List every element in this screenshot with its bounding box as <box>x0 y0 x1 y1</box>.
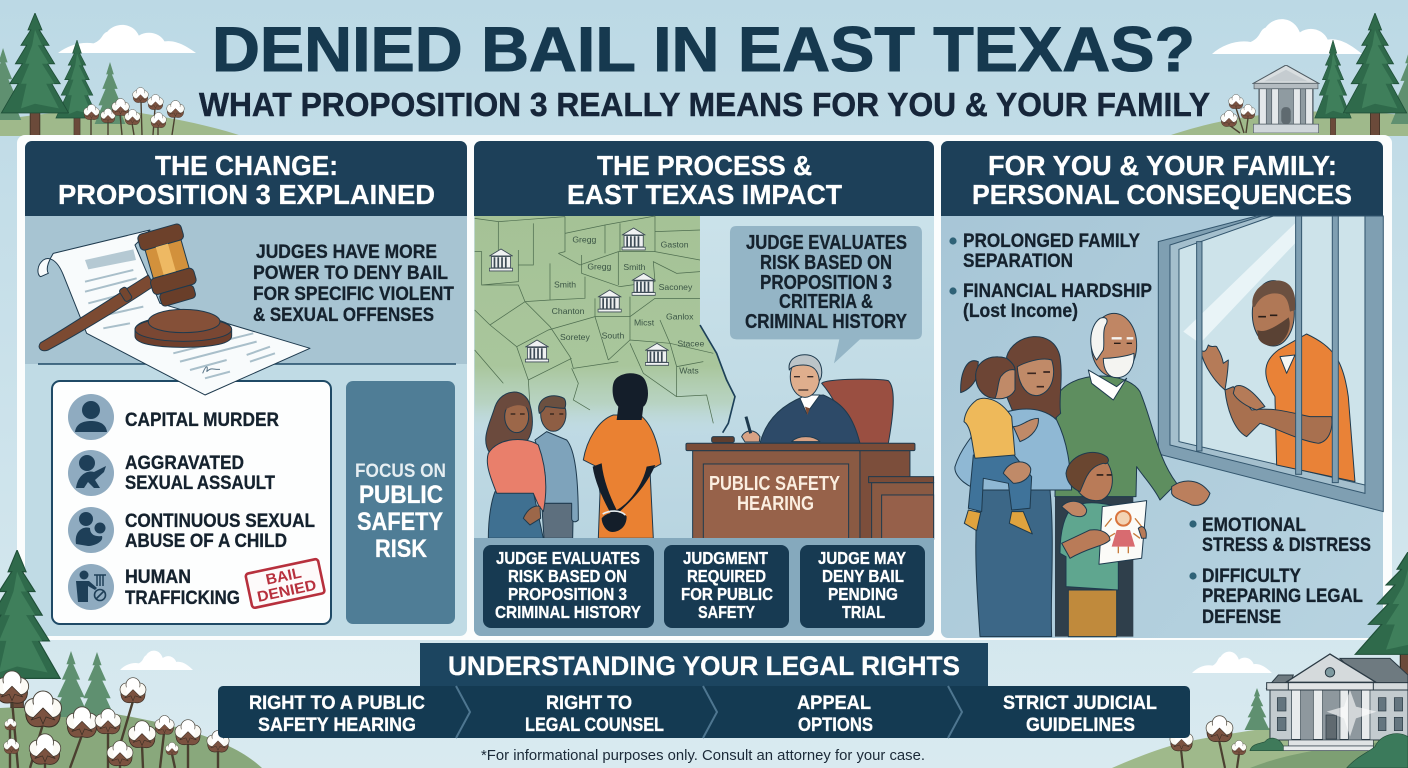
rights chevron bar <box>218 686 1190 738</box>
panel 2 header: THE PROCESS & <box>597 150 812 181</box>
offense: human trafficking <box>125 567 240 609</box>
courthouse top right <box>1253 65 1319 133</box>
bullet list top: PROLONGED FAMILY <box>963 231 1140 252</box>
map of east texas: Smith <box>623 262 646 272</box>
map of east texas <box>475 216 735 437</box>
hills bottom <box>0 707 1408 768</box>
hills top <box>0 110 1408 136</box>
offense: continuous sexual abuse <box>125 511 315 552</box>
daughter <box>961 357 1038 534</box>
speech bubble text: CRITERIA & <box>779 291 873 313</box>
trees top left <box>0 13 125 136</box>
right 3: APPEAL <box>797 692 871 714</box>
bullet list top: SEPARATION <box>963 251 1073 272</box>
bullet list bottom: STRESS & DISTRESS <box>1202 535 1371 556</box>
bullet list top: (Lost Income) <box>963 301 1078 322</box>
gavel handle <box>39 275 154 351</box>
trees bottom left <box>0 550 115 718</box>
main white card <box>17 135 1392 640</box>
panel: the change <box>25 141 467 636</box>
icon: trafficking <box>68 564 114 610</box>
right 2: LEGAL COUNSEL <box>525 714 664 736</box>
map of east texas: Chanton <box>552 306 585 316</box>
right 3: OPTIONS <box>798 714 873 736</box>
panel 3 header <box>941 141 1383 216</box>
panel 1 header <box>25 141 467 216</box>
disclaimer: *For informational purposes only. Consult an attorney for your case. <box>481 748 925 764</box>
step box 2: REQUIRED <box>687 566 766 586</box>
bullet list bottom: DEFENSE <box>1202 607 1281 628</box>
white offenses card <box>52 381 331 624</box>
offense: aggravated sexual assault: AGGRAVATED <box>125 453 244 474</box>
cotton top right <box>1221 94 1255 133</box>
panel 2 header: EAST TEXAS IMPACT <box>567 179 842 210</box>
step box 1: CRIMINAL HISTORY <box>495 602 641 622</box>
legal rights heading <box>420 643 988 687</box>
prisoner from behind <box>583 373 661 538</box>
cotton top left <box>84 87 184 135</box>
speech bubble <box>730 226 922 363</box>
panel 1 header: PROPOSITION 3 EXPLAINED <box>58 179 435 210</box>
right 2 <box>525 692 664 736</box>
mother with daughter <box>955 337 1072 637</box>
focus on public safety risk box: RISK <box>375 535 427 563</box>
desk label: HEARING <box>737 493 814 515</box>
offense: continuous sexual abuse: ABUSE OF A CHILD <box>125 531 287 552</box>
step box 1: JUDGE EVALUATES <box>496 548 640 568</box>
map of east texas: Gaston <box>661 240 689 250</box>
gavel sound block <box>135 309 232 347</box>
panel 3 header: PERSONAL CONSEQUENCES <box>972 179 1352 210</box>
document <box>38 230 310 395</box>
trees bottom right <box>1245 552 1408 730</box>
right 1: RIGHT TO A PUBLIC <box>249 692 425 714</box>
step box 3 <box>800 545 925 628</box>
offense: human trafficking: TRAFFICKING <box>125 588 240 609</box>
icon: adult and child <box>68 507 114 553</box>
step box 2: FOR PUBLIC <box>681 584 773 604</box>
step box 1: PROPOSITION 3 <box>508 584 627 604</box>
step box 3: JUDGE MAY <box>818 548 906 568</box>
judges text: FOR SPECIFIC VIOLENT <box>253 284 454 305</box>
judge <box>712 355 860 443</box>
step box 2 <box>664 545 789 628</box>
map of east texas: Gregg <box>572 235 597 245</box>
bullet list top: FINANCIAL HARDSHIP <box>963 281 1152 302</box>
bail denied stamp <box>245 559 325 608</box>
clouds <box>58 19 1362 673</box>
speech bubble text <box>745 232 908 333</box>
desk <box>686 443 934 539</box>
step box 2: SAFETY <box>698 602 755 622</box>
cotton bottom left <box>0 671 229 768</box>
bail denied stamp: DENIED <box>256 577 318 606</box>
speech bubble text: RISK BASED ON <box>760 252 892 274</box>
chair <box>822 379 893 443</box>
step box 1: RISK BASED ON <box>508 566 627 586</box>
subtitle: WHAT PROPOSITION 3 REALLY MEANS FOR YOU & YOUR FAMILY <box>199 86 1210 123</box>
bottom strip <box>474 538 934 636</box>
courthouse bottom right <box>1250 654 1408 768</box>
step box 3: TRIAL <box>842 602 885 622</box>
focus on public safety risk box: SAFETY <box>357 508 443 536</box>
speech bubble text: CRIMINAL HISTORY <box>745 311 908 333</box>
map of east texas: Saconey <box>659 282 693 292</box>
grandfather <box>1055 313 1210 637</box>
judges text: & SEXUAL OFFENSES <box>253 305 434 326</box>
panel: the process <box>474 141 934 636</box>
focus on public safety risk box: PUBLIC <box>359 481 443 509</box>
map of east texas: Smith <box>554 279 576 289</box>
step box 3: PENDING <box>828 584 898 604</box>
right 2: RIGHT TO <box>546 692 632 714</box>
title: DENIED BAIL IN EAST TEXAS? <box>212 15 1195 85</box>
bullet list bottom <box>1189 515 1371 628</box>
speech bubble text: JUDGE EVALUATES <box>746 232 907 254</box>
map of east texas: Micst <box>634 318 655 328</box>
desk label <box>709 473 841 515</box>
offense: aggravated sexual assault: SEXUAL ASSAULT <box>125 473 275 494</box>
legal rights heading: UNDERSTANDING YOUR LEGAL RIGHTS <box>448 651 960 681</box>
gavel head <box>137 223 201 308</box>
right 4: GUIDELINES <box>1026 714 1135 736</box>
bail denied stamp: BAIL <box>264 565 303 589</box>
map of east texas: South <box>602 330 624 340</box>
offense: human trafficking: HUMAN <box>125 567 191 588</box>
icon: person in suit <box>68 394 114 440</box>
woman <box>486 392 546 538</box>
panel: for you and your family <box>941 141 1383 638</box>
step box 3: DENY BAIL <box>822 566 904 586</box>
speech bubble text: PROPOSITION 3 <box>760 272 892 294</box>
step box 1 <box>483 545 654 628</box>
map of east texas: Wats <box>679 365 699 375</box>
focus on public safety risk box <box>346 381 455 624</box>
step box 2: JUDGMENT <box>683 548 768 568</box>
bullet list bottom: DIFFICULTY <box>1202 566 1301 587</box>
illustration: gavel and document <box>38 223 310 395</box>
map of east texas: Ganlox <box>666 311 694 321</box>
right 1 <box>249 692 425 736</box>
panel 2 header <box>474 141 934 216</box>
bullet list top <box>949 231 1152 322</box>
bullet list bottom: PREPARING LEGAL <box>1202 586 1363 607</box>
icon: assault <box>68 450 114 496</box>
offense: aggravated sexual assault <box>125 453 275 494</box>
right 4 <box>1003 692 1157 736</box>
desk label: PUBLIC SAFETY <box>709 473 841 495</box>
judges text: JUDGES HAVE MORE <box>256 242 437 263</box>
panel 1 header: THE CHANGE: <box>155 150 338 181</box>
boy with drawing <box>1060 452 1147 637</box>
trees top right <box>1315 13 1408 136</box>
map of east texas: Gregg <box>587 261 612 271</box>
bullet list bottom: EMOTIONAL <box>1202 515 1306 536</box>
offense: capital murder: CAPITAL MURDER <box>125 410 279 431</box>
right 1: SAFETY HEARING <box>258 714 416 736</box>
jail window <box>1158 216 1383 512</box>
right 4: STRICT JUDICIAL <box>1003 692 1157 714</box>
focus on public safety risk box: FOCUS ON <box>355 461 446 482</box>
panel 3 header: FOR YOU & YOUR FAMILY: <box>988 150 1337 181</box>
cotton bottom right <box>1170 716 1246 768</box>
prisoner at window <box>1201 281 1355 482</box>
window bars <box>1197 216 1338 483</box>
judges text <box>253 242 454 326</box>
map of east texas: Stacee <box>677 339 704 349</box>
offense: continuous sexual abuse: CONTINUOUS SEXUAL <box>125 511 315 532</box>
judges text: POWER TO DENY BAIL <box>253 263 448 284</box>
right 3 <box>797 692 873 736</box>
man <box>535 396 578 538</box>
map of east texas: Soretey <box>560 332 590 342</box>
